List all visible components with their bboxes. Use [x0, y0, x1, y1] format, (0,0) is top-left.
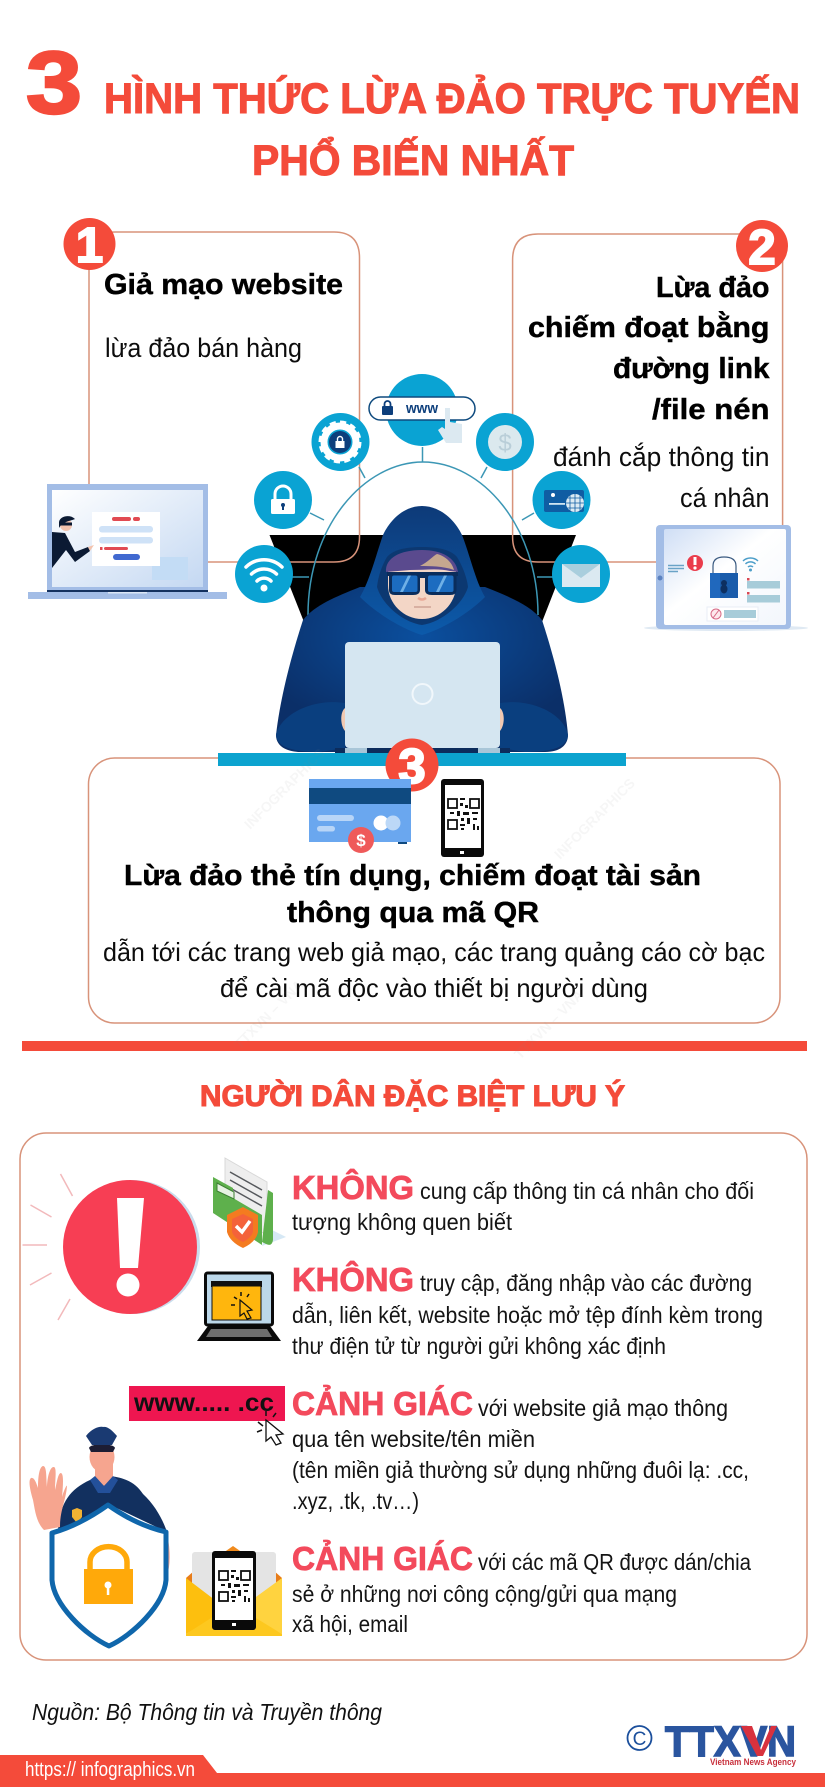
badge 2 — [736, 220, 788, 275]
text: warning 1: cung cấp thông tin cá nhân cho đối — [420, 1178, 754, 1204]
hoodie body — [276, 587, 568, 752]
text: warning 3: .xyz, .tk, .tv…) — [292, 1488, 419, 1514]
icon: fake domain box with cursor: www..... .cc — [133, 1389, 274, 1417]
text: method 3 description: dẫn tới các trang web giả mạo, các trang quảng cáo cờ bạc — [103, 937, 765, 967]
text: warning 1: tượng không quen biết — [292, 1209, 512, 1235]
text: method 2 description: cá nhân — [680, 483, 770, 513]
badge — [72, 1508, 82, 1523]
icon: padlock — [254, 471, 312, 529]
faint watermarks: INFOGRAPHICS — [241, 745, 328, 832]
title — [26, 33, 800, 185]
text: warning 4: CẢNH GIÁC — [292, 1540, 473, 1577]
heading: method 2: Lừa đảo — [656, 272, 770, 304]
badge 2: 2 — [748, 221, 776, 275]
sunglasses — [387, 572, 458, 595]
text: warning 4 — [292, 1540, 752, 1637]
heading: method 2: đường link — [613, 353, 770, 385]
panel: warnings — [20, 1133, 807, 1660]
arms — [276, 702, 568, 752]
text: warning 3 — [292, 1385, 749, 1514]
faint watermarks — [231, 745, 638, 1062]
icon: wifi — [235, 545, 293, 603]
network arc with connectors — [292, 447, 553, 615]
inner hood — [377, 547, 468, 625]
text: warning 2: KHÔNG — [292, 1260, 414, 1298]
icon: url circle — [369, 374, 475, 446]
text: method 3 description: để cài mã độc vào thiết bị người dùng — [220, 973, 648, 1003]
desk bar — [218, 753, 626, 766]
text: warning 3: với website giả mạo thông — [478, 1395, 728, 1421]
heading: warning section: NGƯỜI DÂN ĐẶC BIỆT LƯU Ý — [200, 1079, 625, 1113]
black backdrop behind hacker — [270, 535, 576, 622]
text: method 1 description: lừa đảo bán hàng — [105, 333, 302, 363]
heading: method 2: /file nén — [652, 394, 770, 426]
shield — [52, 1505, 166, 1646]
heading: method 3: thông qua mã QR — [287, 897, 539, 929]
icon: phone with QR code — [441, 779, 484, 857]
faint watermarks: TTXVN – VNA — [511, 986, 586, 1062]
hands — [341, 708, 504, 731]
text: warning 4: với các mã QR được dán/chia — [478, 1549, 752, 1575]
badge 3: 3 — [398, 740, 426, 794]
text: warning 4: sẻ ở những nơi công cộng/gửi qua mạng — [292, 1581, 677, 1607]
text: warning 4: xã hội, email — [292, 1611, 408, 1637]
text: warning 2: thư điện tử từ người gửi không xác định — [292, 1333, 666, 1359]
icon: credit card: $ — [356, 831, 366, 850]
footer url: https:// infographics.vn — [25, 1759, 195, 1781]
text: warning 2 — [292, 1260, 763, 1359]
badge 1 — [64, 218, 116, 273]
heading: method 3: Lừa đảo thẻ tín dụng, chiếm đoạt tài sản — [124, 860, 701, 892]
icon: envelope with QR phone — [186, 1546, 282, 1636]
title: PHỔ BIẾN NHẤT — [252, 135, 574, 185]
icon: exclamation mark — [22, 1174, 200, 1320]
padlock — [84, 1547, 133, 1604]
panel: method 1 — [64, 218, 360, 562]
faint watermarks: INFOGRAPHICS — [551, 775, 638, 862]
illustration: fake-login laptop — [28, 484, 227, 599]
text: method 2 description — [553, 441, 770, 513]
police cap — [86, 1427, 117, 1445]
divider bar — [22, 1041, 807, 1051]
icon: laptop with cursor — [197, 1273, 281, 1341]
badge 3 — [386, 738, 438, 794]
icon: mail — [552, 545, 610, 603]
text: warning 2: dẫn, liên kết, website hoặc mở tệp đính kèm trong — [292, 1302, 763, 1328]
badge 1: 1 — [76, 219, 103, 273]
icon: fake domain box with cursor — [129, 1386, 285, 1445]
icon: gear lock — [312, 413, 370, 471]
neck and face — [95, 1460, 113, 1486]
icon: card and globe — [532, 471, 590, 529]
text: warning 1 — [292, 1168, 754, 1235]
text: warning 3: (tên miền giả thường sử dụng những đuôi lạ: .cc, — [292, 1457, 749, 1483]
face — [388, 568, 456, 619]
icon: credit card — [309, 779, 411, 853]
heading: method 2: chiếm đoạt bằng — [528, 310, 770, 344]
icon: url circle: www — [405, 400, 438, 417]
logo: TTXVN: TTXVN — [665, 1718, 796, 1766]
hood — [360, 506, 485, 635]
panel: method 3 — [88, 738, 780, 1023]
title: 3 — [26, 33, 82, 132]
heading: method 3 — [124, 860, 701, 929]
hair — [386, 550, 458, 572]
icon: dollar: $ — [498, 430, 512, 457]
illustration: hacked tablet — [644, 525, 808, 631]
logo: TTXVN: Vietnam News Agency — [710, 1757, 797, 1768]
icon: dollar — [476, 413, 534, 471]
heading: method 2 — [528, 272, 770, 426]
uniform — [58, 1476, 167, 1534]
text: warning 3: CẢNH GIÁC — [292, 1385, 473, 1422]
illustration: police officer with shield — [30, 1427, 170, 1646]
text: method 3 description — [103, 937, 765, 1003]
nose and mouth — [418, 598, 426, 600]
footer band — [0, 1755, 825, 1787]
text: warning 2: truy cập, đăng nhập vào các đường — [420, 1270, 752, 1296]
laptop — [345, 642, 500, 748]
hand — [30, 1466, 67, 1530]
text: warning 1: KHÔNG — [292, 1168, 414, 1206]
illustration: hacker — [276, 506, 568, 753]
faint watermarks: TTXVN – VNA — [231, 976, 306, 1052]
text: warning 3: qua tên website/tên miền — [292, 1426, 535, 1452]
icon: folder with shield — [213, 1158, 286, 1248]
text: method 2 description: đánh cắp thông tin — [553, 441, 770, 472]
source credit: Nguồn: Bộ Thông tin và Truyền thông — [32, 1699, 382, 1725]
panel: method 2 — [513, 220, 788, 562]
logo: TTXVN: C — [633, 1729, 646, 1750]
right arm — [164, 1530, 170, 1572]
heading: method 1: Giả mạo website — [104, 269, 343, 301]
